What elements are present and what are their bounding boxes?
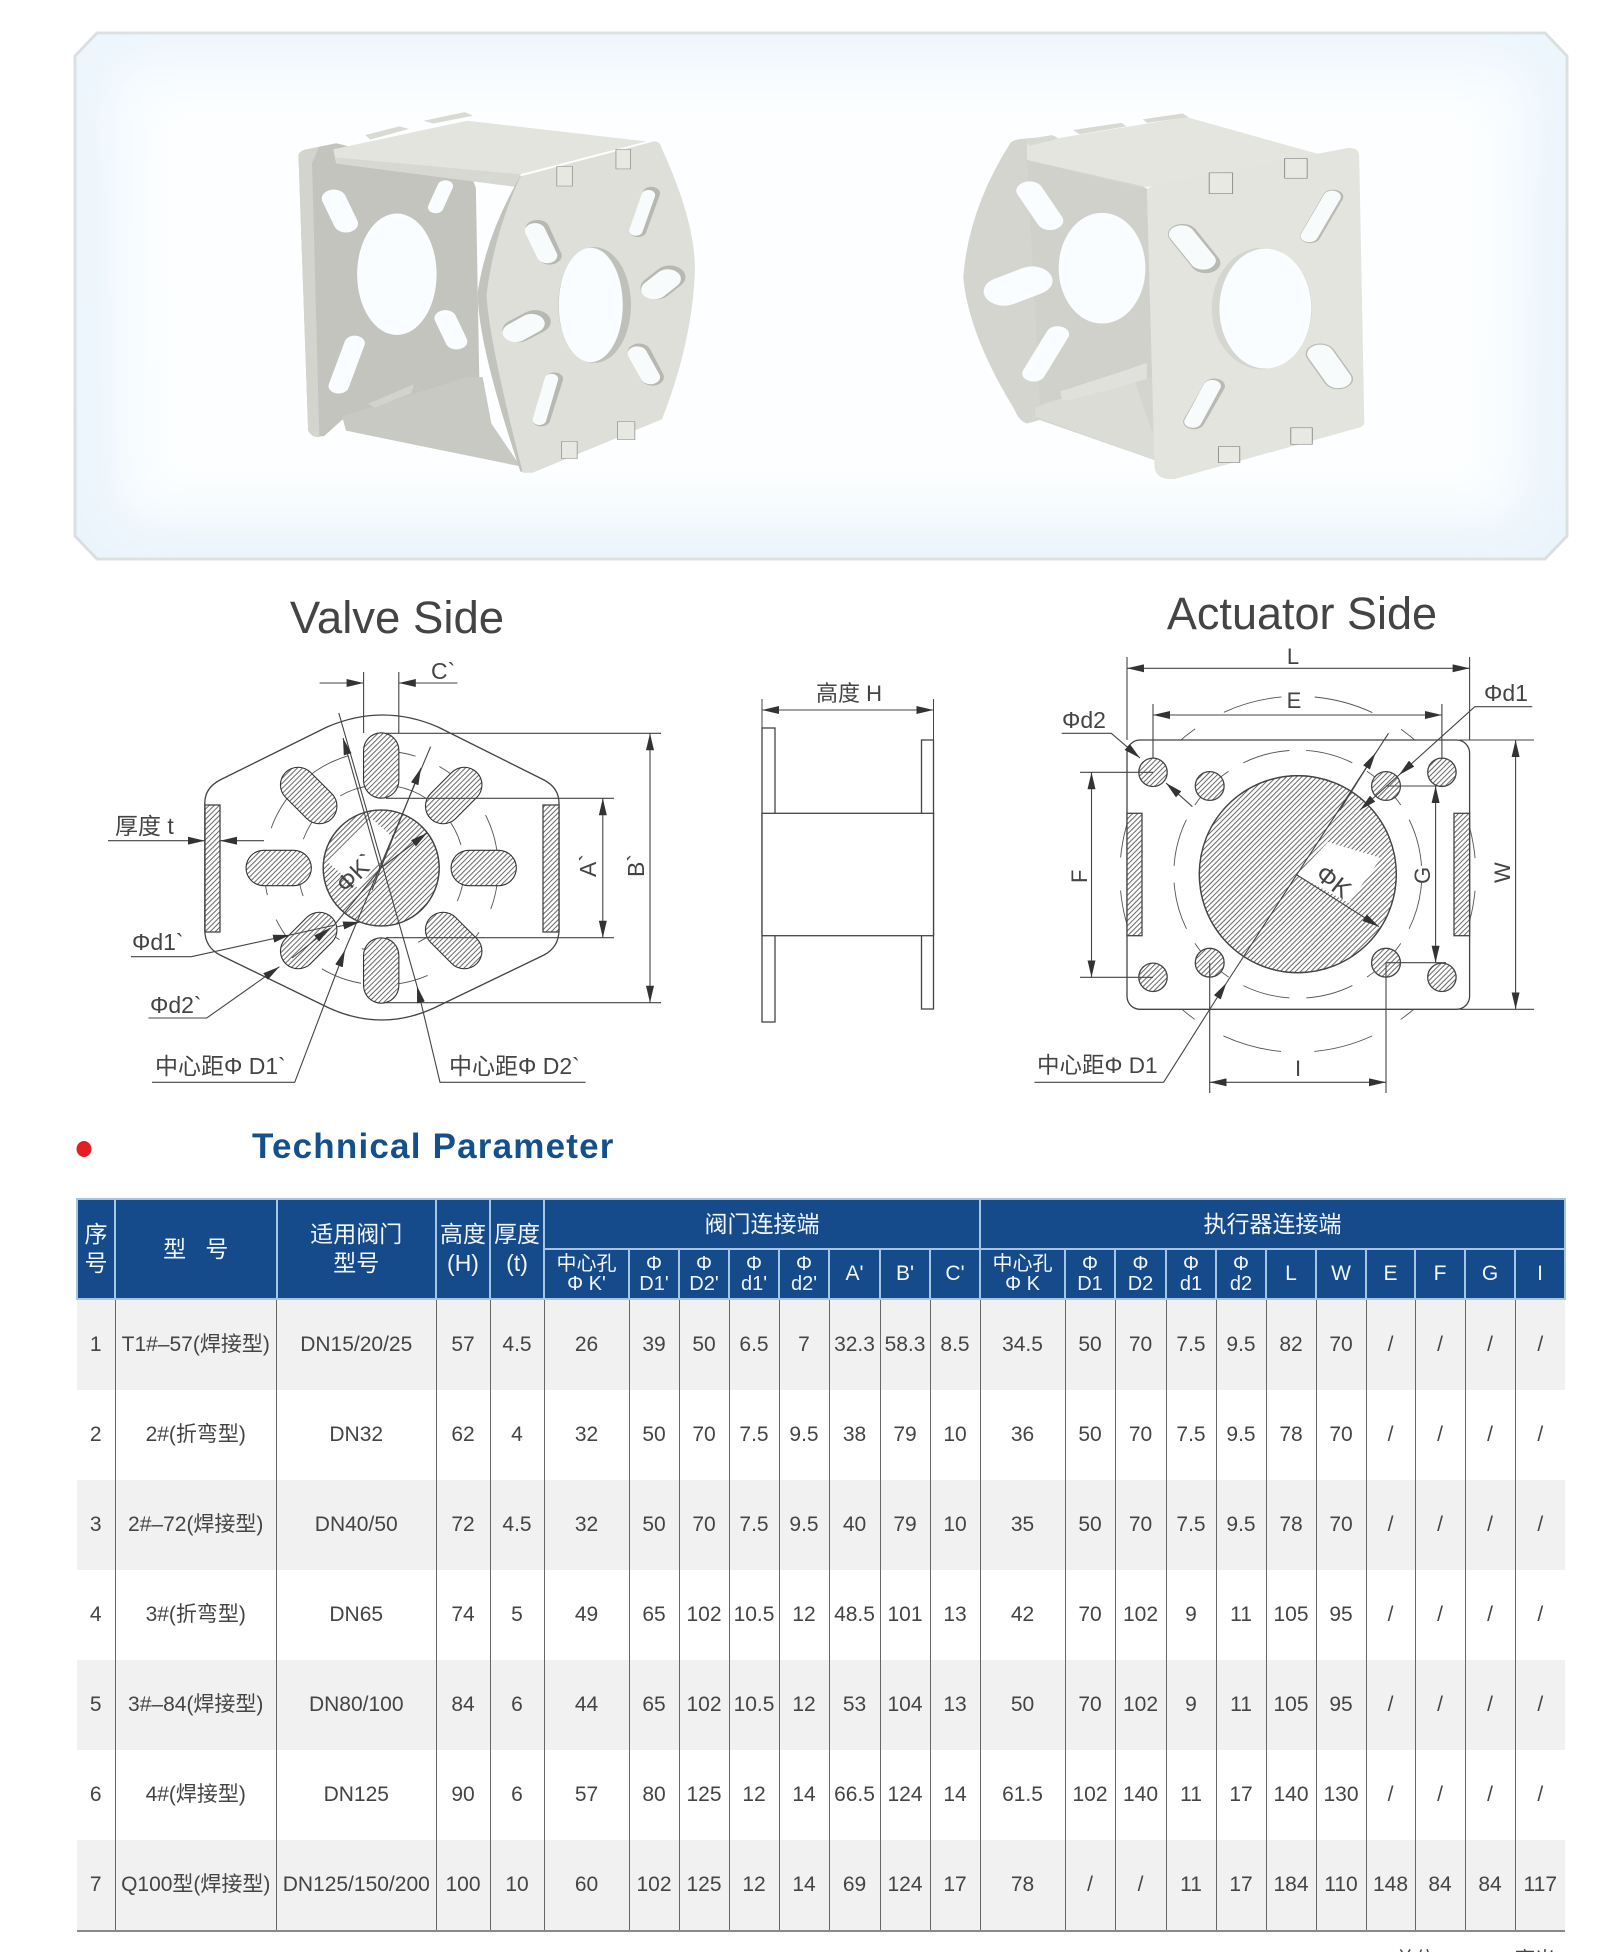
table: technical parameters: 8.5 bbox=[940, 1333, 970, 1356]
table: technical parameters: 74 bbox=[451, 1603, 475, 1626]
table: technical parameters: / bbox=[1437, 1783, 1443, 1806]
table: technical parameters: DN15/20/25 bbox=[300, 1333, 412, 1356]
table: technical parameters: DN32 bbox=[329, 1423, 383, 1446]
centre bore bbox=[1199, 776, 1396, 973]
table: technical parameters: 84 bbox=[1478, 1873, 1502, 1896]
table: technical parameters: 53 bbox=[843, 1693, 866, 1716]
table: technical parameters: 49 bbox=[575, 1603, 598, 1626]
table: technical parameters: 62 bbox=[451, 1423, 475, 1446]
table: technical parameters: 95 bbox=[1329, 1603, 1353, 1626]
table: technical parameters: / bbox=[1388, 1423, 1393, 1446]
table: technical parameters: E bbox=[1383, 1262, 1398, 1285]
table: technical parameters: / bbox=[1537, 1423, 1543, 1446]
labels: actuator side: Φd1 bbox=[1484, 680, 1528, 706]
table: technical parameters: 50 bbox=[642, 1513, 666, 1536]
table: technical parameters: Φ K' bbox=[567, 1273, 606, 1295]
table: technical parameters: 90 bbox=[451, 1783, 475, 1806]
drawing: side view height bbox=[762, 699, 934, 1022]
labels: actuator side: L bbox=[1287, 644, 1299, 669]
label: height H: 高度 H bbox=[816, 681, 882, 706]
table: technical parameters: d2' bbox=[791, 1273, 817, 1295]
table: technical parameters: 140 bbox=[1123, 1783, 1158, 1806]
table: technical parameters: 2 bbox=[90, 1423, 102, 1446]
table: technical parameters: 102 bbox=[1072, 1783, 1108, 1806]
labels: actuator side: 中心距Φ D1 bbox=[1037, 1053, 1157, 1078]
table: technical parameters: B' bbox=[896, 1262, 914, 1285]
table: technical parameters: 7.5 bbox=[739, 1423, 769, 1446]
table: technical parameters: 6 bbox=[90, 1783, 102, 1806]
table: technical parameters: T1#–57(焊接型) bbox=[122, 1333, 270, 1356]
side bars bbox=[205, 805, 559, 932]
table: technical parameters: 14 bbox=[943, 1783, 967, 1806]
table: technical parameters: / bbox=[1487, 1693, 1493, 1716]
table: technical parameters: L bbox=[1285, 1262, 1297, 1285]
table: technical parameters: 70 bbox=[1129, 1423, 1152, 1446]
labels: valve side: 厚度 t bbox=[115, 813, 174, 839]
table: technical parameters: 57 bbox=[575, 1783, 598, 1806]
table: technical parameters: DN125/150/200 bbox=[283, 1873, 430, 1896]
table: technical parameters: 44 bbox=[575, 1693, 598, 1716]
labels: valve side: Φd2` bbox=[150, 992, 202, 1018]
table: technical parameters: 40 bbox=[843, 1513, 866, 1536]
table: technical parameters: 32 bbox=[575, 1423, 598, 1446]
table: technical parameters: 9.5 bbox=[1226, 1423, 1256, 1446]
table: technical parameters: 13 bbox=[943, 1693, 967, 1716]
labels: valve side: Φd1` bbox=[132, 929, 184, 955]
table: technical parameters: 6.5 bbox=[739, 1333, 769, 1356]
d2 leader bbox=[148, 967, 279, 1018]
thickness dimension bbox=[108, 840, 205, 842]
table: technical parameters: 124 bbox=[887, 1873, 923, 1896]
table: technical parameters: 32.3 bbox=[834, 1333, 875, 1356]
table: technical parameters: 70 bbox=[1329, 1333, 1353, 1356]
table: technical parameters: 4.5 bbox=[502, 1333, 532, 1356]
labels: actuator side: E bbox=[1287, 688, 1301, 713]
table: technical parameters: 12 bbox=[792, 1603, 816, 1626]
table: technical parameters: 厚度 bbox=[494, 1221, 540, 1247]
table: technical parameters: 57 bbox=[451, 1333, 475, 1356]
table: technical parameters: / bbox=[1537, 1603, 1543, 1626]
table: technical parameters: 4 bbox=[90, 1603, 102, 1626]
heading: Technical Parameter: Technical Parameter bbox=[252, 1127, 615, 1166]
table: technical parameters: 5 bbox=[90, 1693, 102, 1716]
table: technical parameters: 序 bbox=[84, 1221, 108, 1247]
table: technical parameters: 4.5 bbox=[502, 1513, 532, 1536]
table: technical parameters: 79 bbox=[893, 1513, 917, 1536]
table: technical parameters: 11 bbox=[1180, 1873, 1202, 1896]
table: technical parameters: 5 bbox=[511, 1603, 523, 1626]
table: technical parameters: / bbox=[1487, 1333, 1493, 1356]
table: technical parameters: A' bbox=[845, 1262, 864, 1285]
table: technical parameters: 50 bbox=[692, 1333, 716, 1356]
table: technical parameters: 12 bbox=[742, 1873, 766, 1896]
table: technical parameters: 65 bbox=[642, 1693, 666, 1716]
table: technical parameters: 7 bbox=[90, 1873, 102, 1896]
table: technical parameters: / bbox=[1537, 1333, 1543, 1356]
table: technical parameters: / bbox=[1437, 1333, 1443, 1356]
table: technical parameters: d2 bbox=[1230, 1273, 1252, 1295]
table: technical parameters: / bbox=[1388, 1333, 1393, 1356]
table: technical parameters: 84 bbox=[451, 1693, 475, 1716]
table: technical parameters: 型 号 bbox=[163, 1236, 228, 1262]
table: technical parameters: 101 bbox=[887, 1603, 923, 1626]
K arrows bbox=[381, 833, 427, 868]
table: technical parameters: 9 bbox=[1185, 1693, 1197, 1716]
table: technical parameters: 130 bbox=[1323, 1783, 1359, 1806]
table: technical parameters: 3 bbox=[90, 1513, 102, 1536]
centre bore bbox=[323, 810, 439, 926]
table: technical parameters: 14 bbox=[792, 1873, 816, 1896]
table: technical parameters: 38 bbox=[843, 1423, 866, 1446]
table: technical parameters: 125 bbox=[686, 1873, 722, 1896]
table: technical parameters: 10 bbox=[943, 1513, 967, 1536]
table: technical parameters: / bbox=[1437, 1603, 1443, 1626]
drawing: valve side plate bbox=[205, 715, 559, 1020]
table: technical parameters: 35 bbox=[1011, 1513, 1034, 1536]
table: technical parameters: 7 bbox=[798, 1333, 810, 1356]
table: technical parameters: 36 bbox=[1011, 1423, 1034, 1446]
table: technical parameters: 60 bbox=[575, 1873, 598, 1896]
table: technical parameters: 84 bbox=[1428, 1873, 1452, 1896]
table: technical parameters: 48.5 bbox=[834, 1603, 875, 1626]
table: technical parameters: 117 bbox=[1524, 1873, 1557, 1896]
table: technical parameters: 高度 bbox=[440, 1221, 486, 1247]
table: technical parameters bbox=[76, 1198, 1566, 1932]
table: technical parameters: 50 bbox=[642, 1423, 666, 1446]
table: technical parameters: 11 bbox=[1230, 1603, 1252, 1626]
table: technical parameters: / bbox=[1437, 1693, 1443, 1716]
table: technical parameters: / bbox=[1437, 1513, 1443, 1536]
table: technical parameters: 9.5 bbox=[789, 1513, 819, 1536]
table: technical parameters: D1' bbox=[639, 1273, 669, 1295]
table: technical parameters: 50 bbox=[1011, 1693, 1034, 1716]
table: technical parameters: F bbox=[1434, 1262, 1446, 1285]
table: technical parameters: 执行器连接端 bbox=[1204, 1210, 1342, 1236]
table: technical parameters: 9 bbox=[1185, 1603, 1197, 1626]
table: technical parameters: 10.5 bbox=[734, 1603, 774, 1626]
table: technical parameters: 70 bbox=[1329, 1513, 1353, 1536]
table: technical parameters: 125 bbox=[686, 1783, 722, 1806]
table: technical parameters: 13 bbox=[943, 1603, 967, 1626]
C dimension bbox=[364, 672, 399, 733]
table: technical parameters: / bbox=[1388, 1513, 1393, 1536]
table: technical parameters: 78 bbox=[1279, 1423, 1303, 1446]
table: technical parameters: 2#(折弯型) bbox=[146, 1423, 246, 1446]
table: technical parameters: 70 bbox=[1329, 1423, 1353, 1446]
table: technical parameters: d1 bbox=[1180, 1273, 1202, 1295]
table: technical parameters: 82 bbox=[1279, 1333, 1303, 1356]
table: technical parameters: 50 bbox=[1078, 1333, 1102, 1356]
table: technical parameters: 14 bbox=[792, 1783, 816, 1806]
table: technical parameters: 4 bbox=[511, 1423, 523, 1446]
table: technical parameters: 102 bbox=[1123, 1603, 1158, 1626]
table: technical parameters: 阀门连接端 bbox=[704, 1210, 820, 1236]
table: technical parameters: 17 bbox=[943, 1873, 967, 1896]
table: technical parameters: 1 bbox=[90, 1333, 102, 1356]
table: technical parameters: 6 bbox=[511, 1693, 523, 1716]
labels: valve side: ΦK` bbox=[331, 849, 381, 898]
photo: valve side bracket bbox=[298, 112, 695, 473]
table: technical parameters: 中心孔 bbox=[556, 1253, 616, 1275]
table: technical parameters: 70 bbox=[1129, 1333, 1152, 1356]
drawing: actuator side plate bbox=[1120, 696, 1476, 1052]
heading: Valve Side: Valve Side bbox=[290, 592, 504, 643]
table: technical parameters: / bbox=[1138, 1873, 1143, 1896]
labels: actuator side: I bbox=[1295, 1056, 1301, 1081]
labels: actuator side: ΦK bbox=[1310, 860, 1357, 904]
table: technical parameters: 69 bbox=[843, 1873, 866, 1896]
section marker: red dot bbox=[76, 1141, 92, 1157]
table: technical parameters: 12 bbox=[742, 1783, 766, 1806]
photo: actuator side bracket bbox=[963, 114, 1364, 479]
table: technical parameters: 140 bbox=[1273, 1783, 1309, 1806]
table: technical parameters: / bbox=[1487, 1783, 1493, 1806]
table: technical parameters: Φ bbox=[1133, 1253, 1148, 1275]
table: technical parameters: Φ bbox=[1183, 1253, 1199, 1275]
table: technical parameters: 65 bbox=[642, 1603, 666, 1626]
table: technical parameters: / bbox=[1487, 1423, 1493, 1446]
table: technical parameters: D1 bbox=[1077, 1273, 1103, 1295]
table: technical parameters: 17 bbox=[1229, 1783, 1253, 1806]
table: technical parameters: DN40/50 bbox=[315, 1513, 398, 1536]
table: technical parameters: 7.5 bbox=[739, 1513, 769, 1536]
table: technical parameters: 7.5 bbox=[1176, 1333, 1206, 1356]
table: technical parameters: 10 bbox=[505, 1873, 529, 1896]
table: technical parameters: (t) bbox=[506, 1250, 528, 1276]
D2 leader bbox=[417, 986, 586, 1082]
table: technical parameters: / bbox=[1388, 1783, 1393, 1806]
table: technical parameters: 3#–84(焊接型) bbox=[128, 1693, 263, 1716]
table: technical parameters: 95 bbox=[1329, 1693, 1353, 1716]
table: technical parameters: Φ bbox=[1233, 1253, 1249, 1275]
table: technical parameters: 34.5 bbox=[1002, 1333, 1043, 1356]
table: technical parameters: 70 bbox=[692, 1513, 716, 1536]
table: technical parameters: 10.5 bbox=[734, 1693, 774, 1716]
slotted holes bbox=[264, 750, 499, 986]
table: technical parameters: 12 bbox=[792, 1693, 816, 1716]
table: technical parameters: 9.5 bbox=[1226, 1513, 1256, 1536]
labels: actuator side: Φd2 bbox=[1062, 707, 1106, 733]
table: technical parameters: 61.5 bbox=[1002, 1783, 1043, 1806]
table: technical parameters: 70 bbox=[1078, 1603, 1102, 1626]
table: technical parameters: / bbox=[1537, 1783, 1543, 1806]
table: technical parameters: 102 bbox=[636, 1873, 672, 1896]
table: technical parameters: d1' bbox=[741, 1273, 767, 1295]
table: technical parameters: 100 bbox=[445, 1873, 481, 1896]
table: technical parameters: 26 bbox=[575, 1333, 598, 1356]
table: technical parameters: 72 bbox=[451, 1513, 475, 1536]
table: technical parameters: 4#(焊接型) bbox=[146, 1783, 246, 1806]
table: technical parameters: 中心孔 bbox=[992, 1253, 1052, 1275]
labels: valve side: 中心距Φ D2` bbox=[449, 1053, 580, 1079]
B dimension bbox=[386, 733, 661, 1003]
table: technical parameters: 17 bbox=[1229, 1873, 1253, 1896]
D1 leader bbox=[152, 950, 345, 1082]
table: technical parameters: 7.5 bbox=[1176, 1513, 1206, 1536]
bolt circle bbox=[1174, 750, 1422, 998]
labels: valve side: 中心距Φ D1` bbox=[155, 1053, 286, 1079]
table: technical parameters: 9.5 bbox=[789, 1423, 819, 1446]
table: technical parameters: 105 bbox=[1273, 1693, 1309, 1716]
table: technical parameters: 70 bbox=[1129, 1513, 1152, 1536]
table: technical parameters: 50 bbox=[1078, 1423, 1102, 1446]
table: technical parameters: 2#–72(焊接型) bbox=[128, 1513, 263, 1536]
table: technical parameters: 78 bbox=[1279, 1513, 1303, 1536]
table: technical parameters: 124 bbox=[887, 1783, 923, 1806]
table: technical parameters: 11 bbox=[1230, 1693, 1252, 1716]
labels: valve side bbox=[115, 658, 649, 1079]
table: technical parameters: DN80/100 bbox=[309, 1693, 404, 1716]
table: technical parameters: D2 bbox=[1128, 1273, 1153, 1295]
table: technical parameters: Φ bbox=[796, 1253, 812, 1275]
table: technical parameters: 型号 bbox=[333, 1250, 379, 1276]
table: technical parameters: DN65 bbox=[329, 1603, 383, 1626]
table: technical parameters: 3#(折弯型) bbox=[146, 1603, 246, 1626]
labels: valve side: B` bbox=[623, 854, 649, 877]
table: technical parameters: 78 bbox=[1011, 1873, 1034, 1896]
table: technical parameters: 66.5 bbox=[834, 1783, 875, 1806]
table: technical parameters: 适用阀门 bbox=[310, 1221, 402, 1247]
table: technical parameters: / bbox=[1537, 1693, 1543, 1716]
table: technical parameters: G bbox=[1482, 1262, 1498, 1285]
table: technical parameters: 148 bbox=[1373, 1873, 1408, 1896]
table: technical parameters: 79 bbox=[893, 1423, 917, 1446]
dimensions: actuator side bbox=[1034, 657, 1534, 1093]
table: technical parameters: / bbox=[1487, 1513, 1493, 1536]
table: technical parameters: 39 bbox=[642, 1333, 666, 1356]
dimensions: valve side bbox=[108, 672, 661, 1082]
labels: valve side: C` bbox=[431, 658, 455, 684]
A dimension bbox=[386, 798, 614, 938]
table: technical parameters: 42 bbox=[1011, 1603, 1034, 1626]
table: technical parameters: Φ K bbox=[1005, 1273, 1040, 1295]
table: technical parameters: / bbox=[1388, 1693, 1393, 1716]
table: technical parameters: / bbox=[1487, 1603, 1493, 1626]
table: technical parameters: / bbox=[1087, 1873, 1093, 1896]
heading: Actuator Side: Actuator Side bbox=[1167, 588, 1437, 639]
table: technical parameters: 32 bbox=[575, 1513, 598, 1536]
table: technical parameters: 10 bbox=[943, 1423, 967, 1446]
table: technical parameters: 50 bbox=[1078, 1513, 1102, 1536]
table: technical parameters: Q100型(焊接型) bbox=[121, 1873, 270, 1896]
labels: actuator side bbox=[1037, 644, 1528, 1081]
table: technical parameters: DN125 bbox=[324, 1783, 389, 1806]
table: technical parameters: 号 bbox=[84, 1250, 108, 1276]
table: technical parameters: 70 bbox=[692, 1423, 716, 1446]
d1 leader bbox=[131, 935, 290, 957]
bolt holes bbox=[1139, 758, 1456, 992]
table: technical parameters: 102 bbox=[1123, 1693, 1158, 1716]
table: technical parameters: C' bbox=[945, 1262, 965, 1285]
table: technical parameters: 110 bbox=[1324, 1873, 1358, 1896]
table: technical parameters: (H) bbox=[447, 1250, 479, 1276]
labels: actuator side: F bbox=[1067, 870, 1092, 883]
table: technical parameters: Φ bbox=[1082, 1253, 1098, 1275]
table: technical parameters: 70 bbox=[1078, 1693, 1102, 1716]
labels: actuator side: W bbox=[1490, 862, 1515, 883]
table: technical parameters: 104 bbox=[887, 1693, 923, 1716]
labels: actuator side: G bbox=[1410, 867, 1435, 884]
table: technical parameters: 102 bbox=[686, 1603, 722, 1626]
table: technical parameters: 80 bbox=[642, 1783, 666, 1806]
table: technical parameters: 58.3 bbox=[885, 1333, 925, 1356]
table: technical parameters: 102 bbox=[686, 1693, 722, 1716]
table: technical parameters: / bbox=[1388, 1603, 1393, 1626]
panel: product photos bbox=[75, 33, 1567, 559]
table: technical parameters: Φ bbox=[646, 1253, 662, 1275]
table: technical parameters: Φ bbox=[696, 1253, 712, 1275]
table: technical parameters: Φ bbox=[746, 1253, 762, 1275]
bolt circles bbox=[264, 751, 498, 985]
table: technical parameters: 184 bbox=[1273, 1873, 1309, 1896]
table: technical parameters: W bbox=[1331, 1262, 1351, 1285]
table: technical parameters: D2' bbox=[689, 1273, 719, 1295]
table: technical parameters: 9.5 bbox=[1226, 1333, 1256, 1356]
table: technical parameters: 7.5 bbox=[1176, 1423, 1206, 1446]
labels: valve side: A` bbox=[575, 854, 601, 877]
table: technical parameters: I bbox=[1537, 1262, 1543, 1285]
table: technical parameters: 11 bbox=[1180, 1783, 1202, 1806]
table: technical parameters: / bbox=[1437, 1423, 1443, 1446]
table: technical parameters: / bbox=[1537, 1513, 1543, 1536]
table: technical parameters: 6 bbox=[511, 1783, 523, 1806]
side bars bbox=[1127, 813, 1470, 936]
table: technical parameters: 105 bbox=[1273, 1603, 1309, 1626]
